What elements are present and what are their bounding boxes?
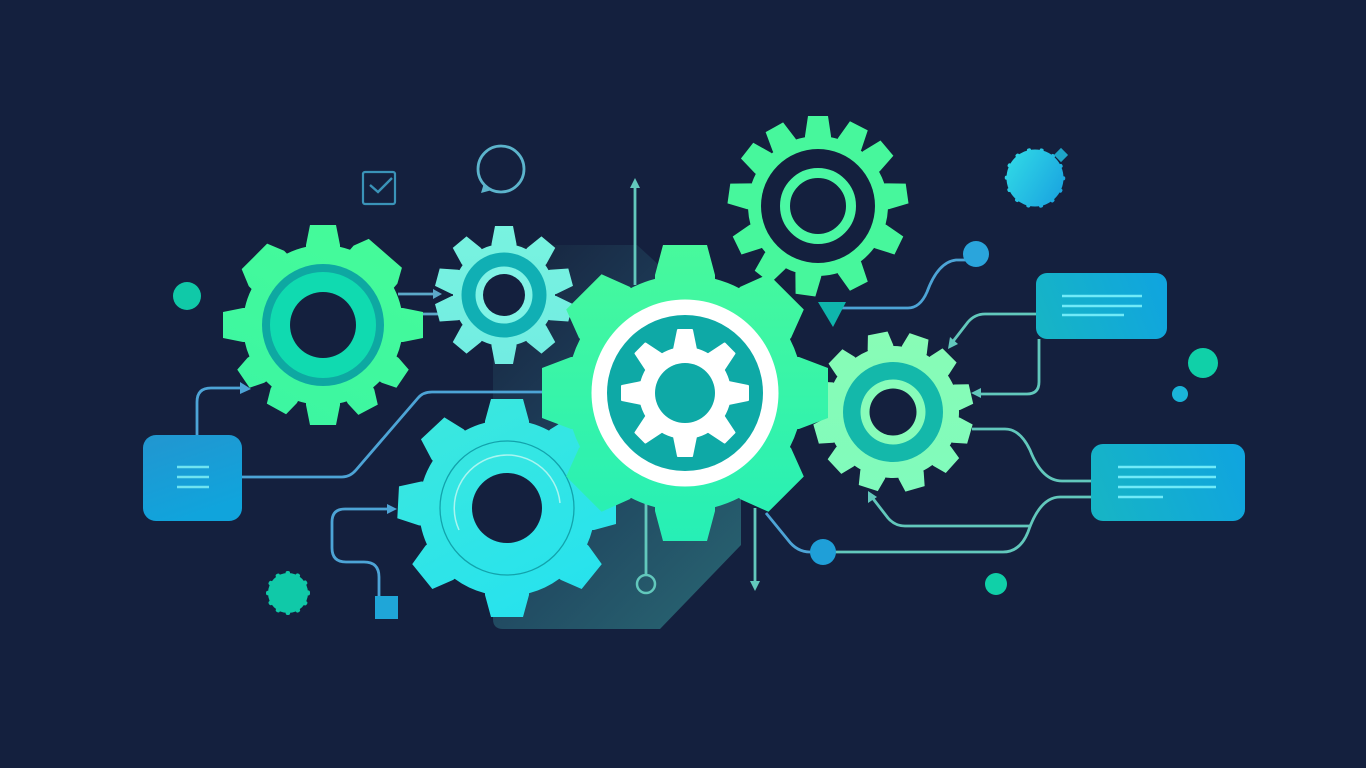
white ring [592, 300, 778, 486]
arrow: up [634, 186, 636, 285]
connector: blue node to lower box [823, 497, 1091, 552]
square terminal [375, 596, 398, 619]
icon: blue bumpy blob [1006, 150, 1064, 206]
box: top right document [1036, 273, 1167, 339]
icon: chat bubble [478, 146, 524, 193]
gear body [536, 244, 834, 542]
teal disc [607, 315, 763, 471]
light arc [454, 455, 560, 530]
gear body [434, 225, 574, 365]
backing panel [493, 245, 741, 629]
arrowhead: upper link [433, 289, 442, 299]
connector: left box to center gear [242, 392, 545, 477]
text lines [1062, 296, 1142, 315]
teal ring [262, 264, 384, 386]
box body [143, 435, 242, 521]
gear body [222, 224, 424, 426]
box: lower right document [1091, 444, 1245, 521]
lower link [420, 313, 441, 315]
gear: left green [222, 224, 424, 426]
connector: top box to gear [951, 314, 1036, 344]
connectors: teal [635, 186, 1091, 584]
dark interior [761, 149, 875, 263]
small diamond [1054, 148, 1068, 162]
connectors: gear A to gear B [398, 289, 442, 314]
text lines [1118, 467, 1216, 497]
connector: triangle to top node [840, 260, 968, 308]
arrowhead: top box connector [948, 337, 958, 349]
arrowhead: gear bottom [868, 491, 877, 503]
dot: left teal [173, 282, 201, 310]
text lines [177, 467, 209, 487]
dot: bottom [985, 573, 1007, 595]
connector: center gear to blue node [766, 513, 823, 552]
gear: center main [536, 244, 834, 542]
box: left document [143, 435, 242, 521]
gear: large cyan [397, 398, 617, 618]
arrowhead: down [750, 581, 760, 591]
arrow: upper link [398, 293, 434, 295]
arrowhead: square connector [387, 504, 397, 514]
dot: right large [1188, 348, 1218, 378]
arrow: down [754, 508, 756, 584]
gear body [727, 115, 909, 297]
connectors: blue [197, 260, 968, 596]
box body [1091, 444, 1245, 521]
triangle marker [818, 302, 846, 327]
gear body [812, 331, 974, 493]
connector: left box to green gear [197, 388, 240, 435]
box body [1036, 273, 1167, 339]
hole [472, 473, 542, 543]
connector: square to cyan gear [332, 509, 388, 596]
hole [870, 388, 916, 436]
gear: small teal [434, 225, 574, 365]
inner ring [785, 173, 851, 239]
teal ring [843, 362, 943, 462]
line: center gear to ring [645, 500, 647, 575]
gear: right mint [812, 331, 974, 493]
arrowhead: up [630, 178, 640, 188]
icon: small bumpy gear [268, 573, 308, 613]
node: lower blue [810, 539, 836, 565]
thin ring [440, 441, 574, 575]
light ring [860, 380, 926, 444]
connector: lower branch to gear [871, 496, 1030, 526]
node: top blue [963, 241, 989, 267]
light ring [476, 266, 532, 324]
ring terminal [637, 575, 655, 593]
inner ring [270, 272, 376, 378]
arrowhead: left box [240, 382, 251, 394]
arrowhead: gear right [971, 388, 981, 398]
dot: right small [1172, 386, 1188, 402]
connector: gear to lower box [972, 429, 1091, 481]
inner white gear [622, 330, 748, 456]
hole [290, 292, 356, 358]
teal ring [462, 252, 546, 338]
inner gear hub [655, 363, 715, 423]
connector: top box down to gear [979, 339, 1039, 394]
gear body [397, 398, 617, 618]
gear: top right outline [727, 115, 909, 297]
hole [483, 274, 525, 316]
icon: checkbox [363, 172, 395, 204]
